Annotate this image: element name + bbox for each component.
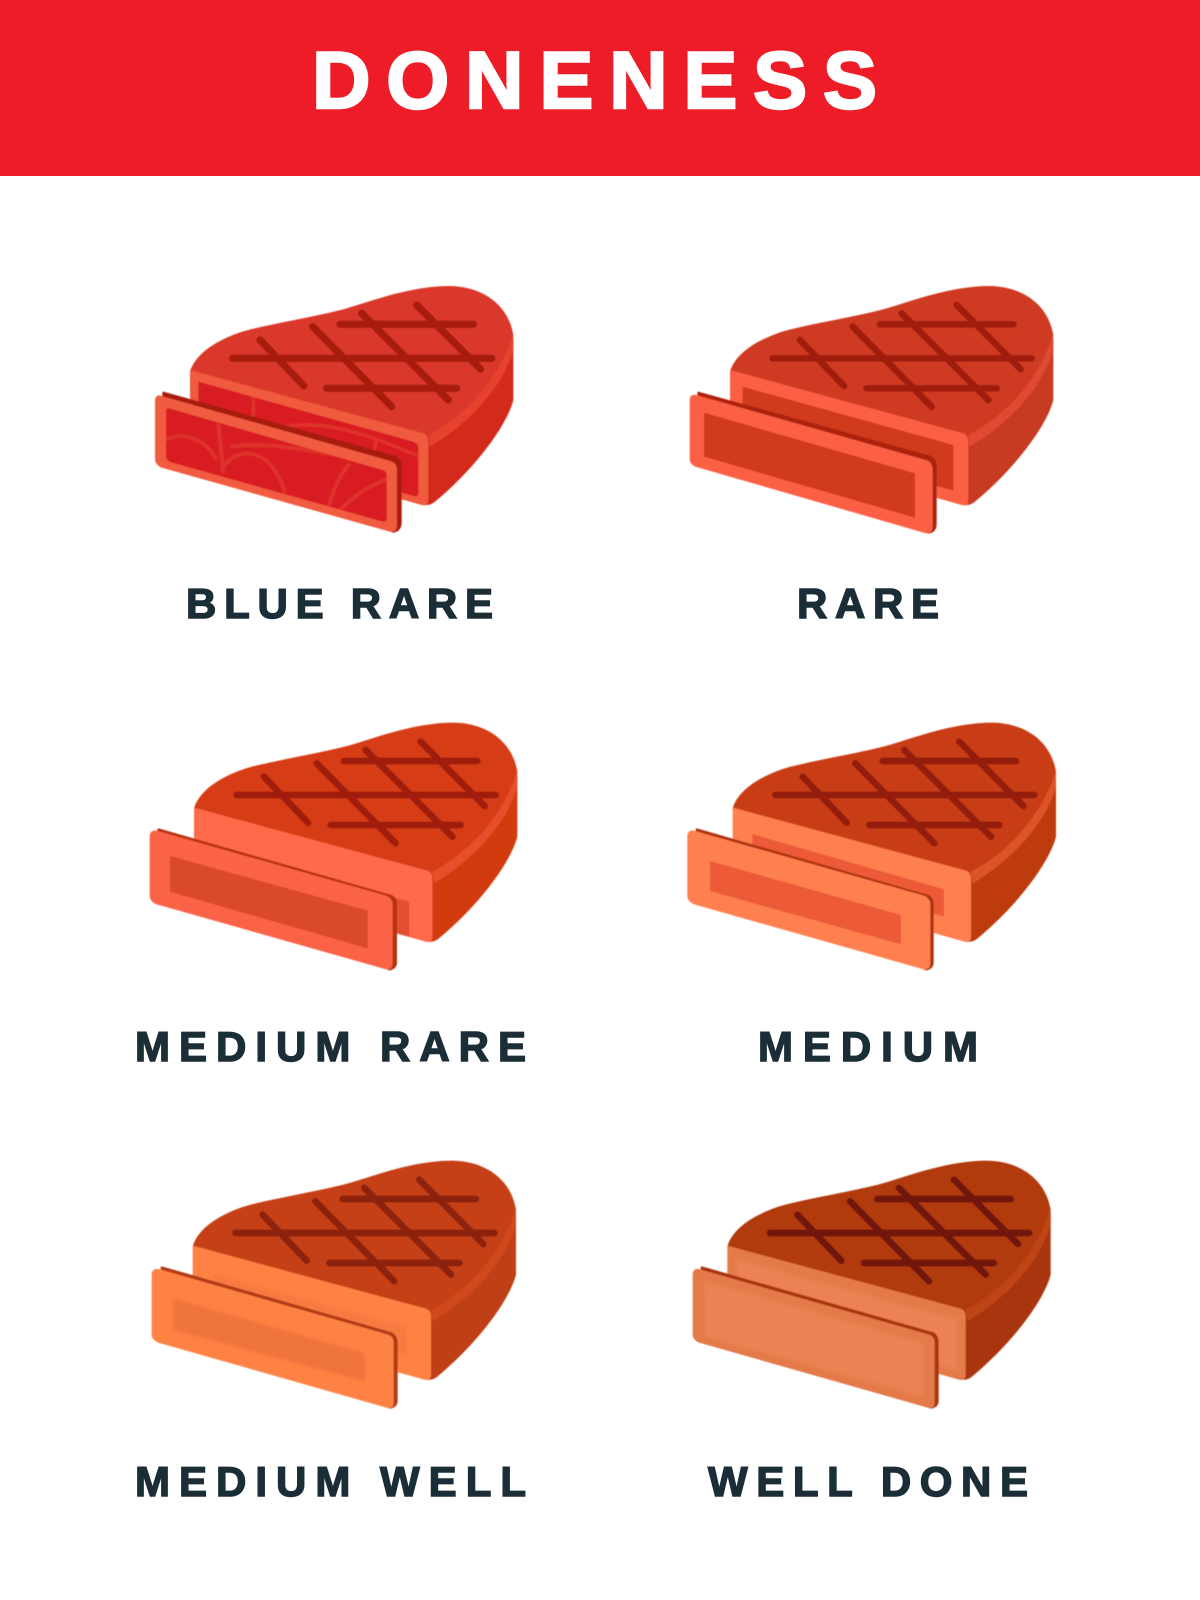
header banner [0,0,1200,176]
steak: blue rare [156,286,513,532]
steak: medium [688,723,1056,969]
label: medium rare: MEDIUM RARE [135,1023,526,1070]
label: blue rare: BLUE RARE [186,580,493,627]
label: medium: MEDIUM [758,1023,978,1070]
label: medium well: MEDIUM WELL [135,1458,526,1505]
steak: medium well [153,1161,516,1408]
label: well done: WELL DONE [708,1458,1028,1505]
label: rare: RARE [797,580,939,627]
title: DONENESS [312,36,877,126]
steak: medium rare [151,723,517,969]
steak: rare [691,286,1053,533]
steak: well done [694,1161,1051,1408]
